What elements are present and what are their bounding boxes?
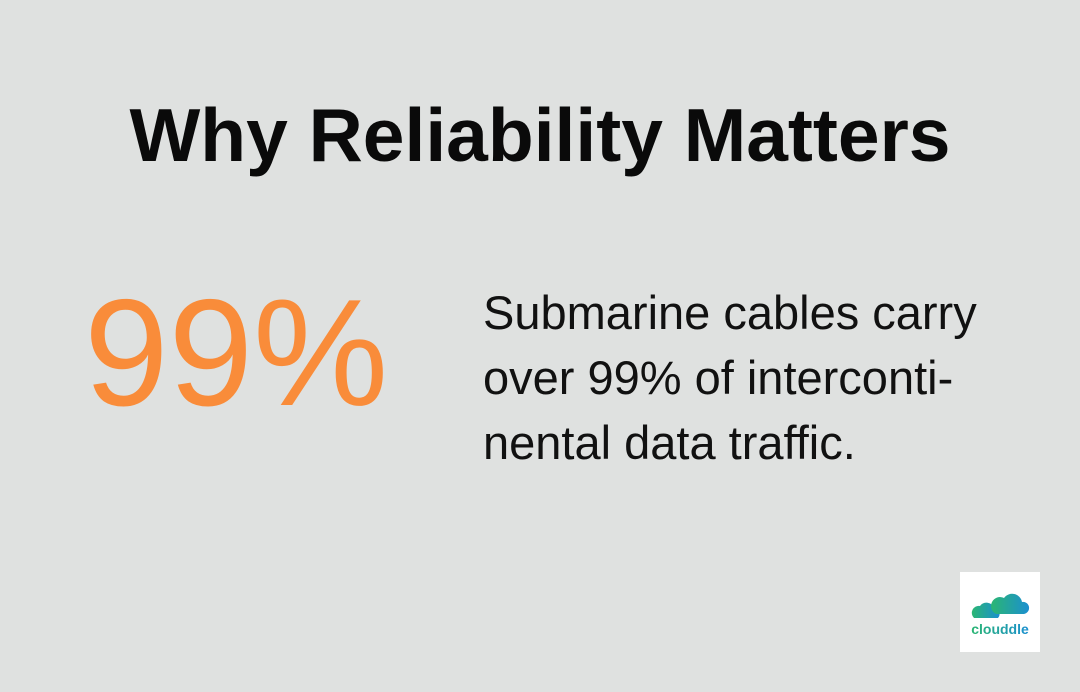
logo: clouddle: clouddle: [971, 621, 1029, 637]
title: Why Reliability Matters: [129, 93, 950, 177]
description text: over 99% of interconti-: [483, 351, 953, 404]
description text: nental data traffic.: [483, 416, 856, 469]
statistic number: 99%: [84, 268, 388, 438]
description text: Submarine cables carry: [483, 286, 977, 339]
logo: clouddle: [960, 572, 1040, 652]
description text: [483, 286, 977, 469]
